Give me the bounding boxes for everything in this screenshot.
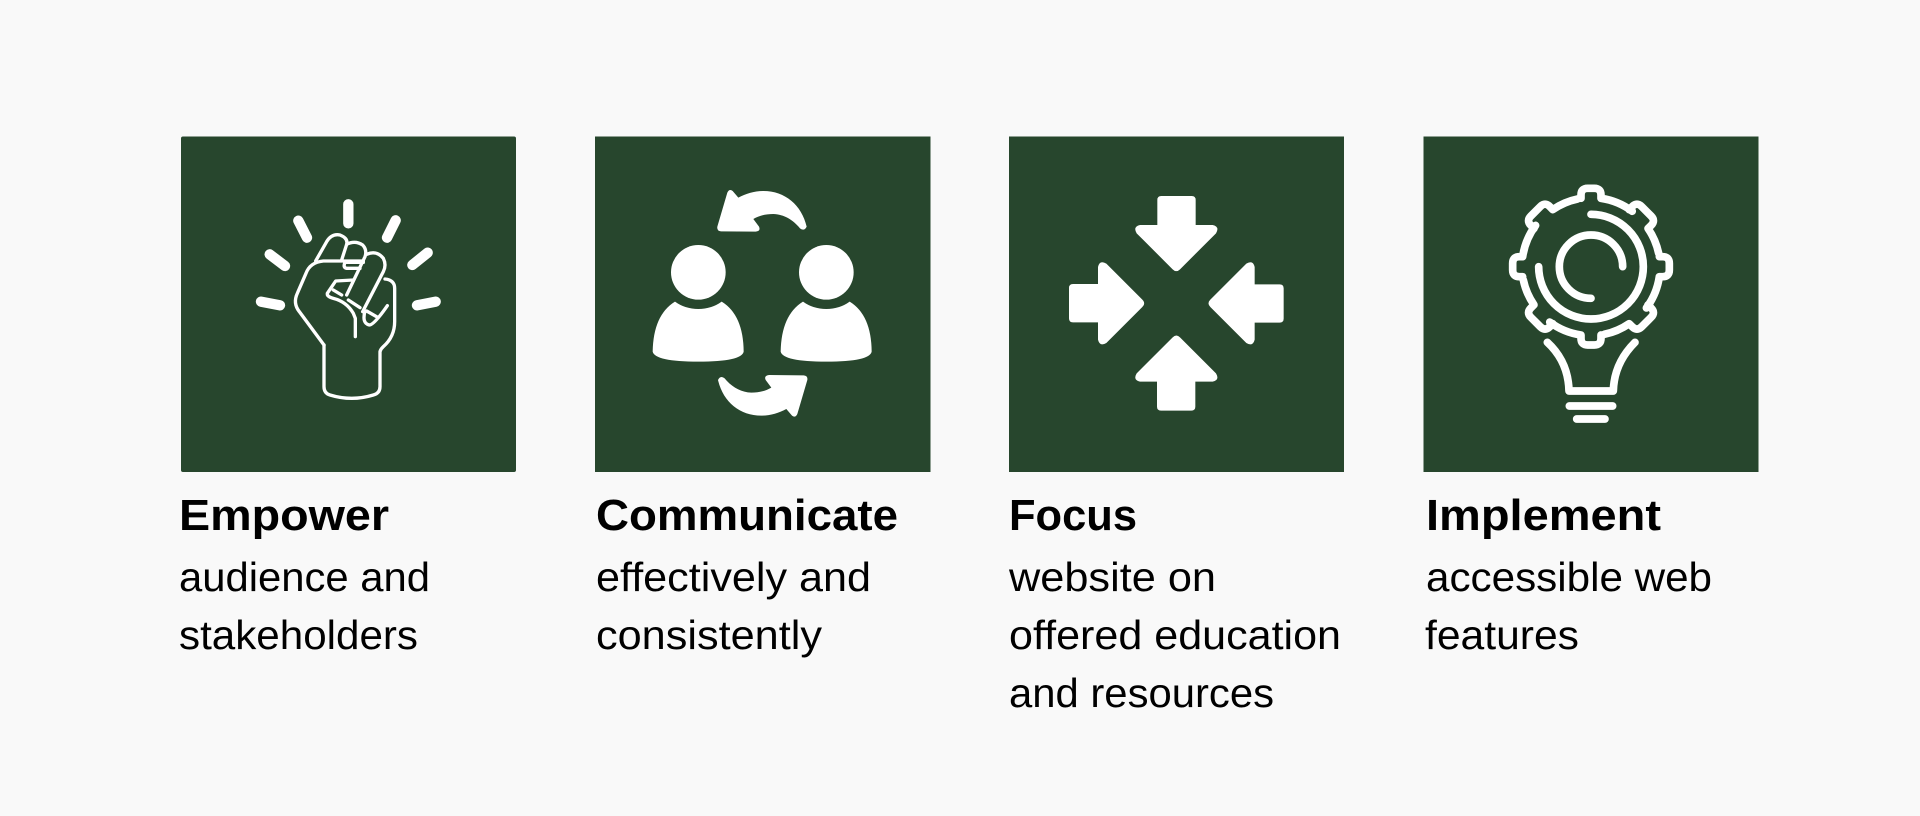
icon: bottom arrow xyxy=(718,375,807,417)
text: empower description: audience and xyxy=(179,554,430,600)
icon: arrow from left xyxy=(1069,262,1144,344)
icon: bulb neck xyxy=(1547,342,1635,391)
icon: top arrow xyxy=(717,190,807,232)
icon: four arrows pointing inward xyxy=(1069,196,1284,411)
icon tile: empower xyxy=(181,136,516,472)
icon: arrow from bottom xyxy=(1135,335,1217,411)
text: focus description xyxy=(1008,554,1341,716)
heading: focus: Focus xyxy=(1009,491,1137,540)
icon tile: implement xyxy=(1424,136,1758,472)
icon: arrow from right xyxy=(1208,262,1284,344)
icon: two people with exchange arrows xyxy=(653,190,872,417)
icon: bulb base xyxy=(1569,406,1613,419)
heading: implement: Implement xyxy=(1426,491,1661,540)
icon: fist outline xyxy=(295,235,395,398)
text: focus description: and resources xyxy=(1009,670,1274,716)
text: communicate description xyxy=(596,554,871,658)
text: communicate description: consistently xyxy=(596,612,823,658)
icon: arrow from top xyxy=(1135,196,1217,271)
icon: gear inner arcs xyxy=(1539,214,1643,319)
icon tile: focus xyxy=(1009,136,1344,472)
icon: gear light bulb xyxy=(1509,184,1673,419)
panel: empower xyxy=(179,136,516,658)
heading: empower: Empower xyxy=(179,491,389,540)
panel: communicate xyxy=(595,136,930,658)
icon: right person xyxy=(781,245,872,362)
icon: gear outline xyxy=(1509,184,1673,349)
text: focus description: website on xyxy=(1008,554,1216,600)
heading: communicate: Communicate xyxy=(596,491,898,540)
text: empower description: stakeholders xyxy=(179,612,418,658)
text: communicate description: effectively and xyxy=(596,554,871,600)
text: implement description: accessible web xyxy=(1426,554,1712,600)
text: implement description xyxy=(1425,554,1712,658)
text: focus description: offered education xyxy=(1009,612,1341,658)
text: empower description xyxy=(179,554,430,658)
panel: implement xyxy=(1424,136,1758,658)
icon tile: communicate xyxy=(595,136,930,472)
panel: focus xyxy=(1008,136,1344,716)
icon: rays xyxy=(261,204,436,305)
icon: raised fist with rays xyxy=(261,204,436,398)
icon: left person xyxy=(653,245,744,362)
text: implement description: features xyxy=(1425,612,1579,658)
